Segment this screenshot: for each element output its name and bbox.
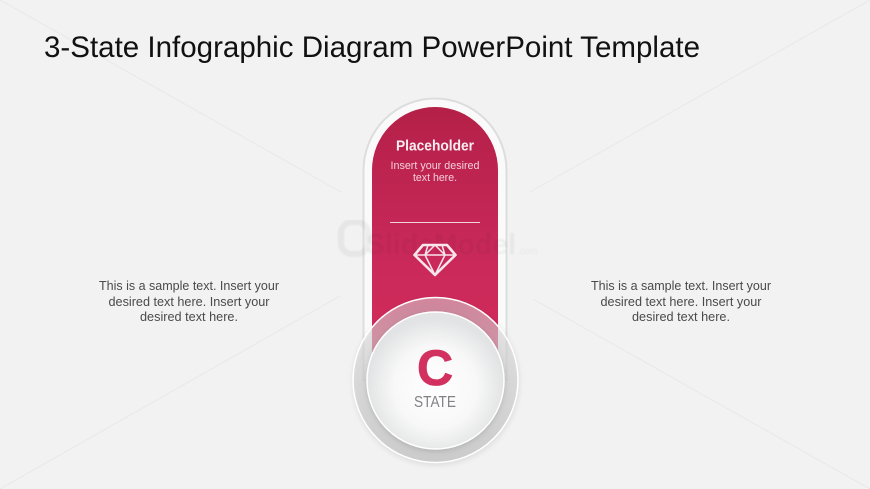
white disc	[367, 312, 504, 449]
icon: diamond	[414, 245, 456, 275]
right text block	[591, 279, 771, 324]
state badge	[353, 298, 519, 465]
watermark: SlideModel	[366, 229, 516, 261]
placeholder heading: Placeholder	[396, 138, 474, 154]
white disc shadow	[366, 313, 504, 451]
capsule outer white frame	[364, 98, 506, 380]
capsule panel	[341, 98, 538, 380]
left text block: This is a sample text. Insert your	[99, 279, 279, 293]
state label: STATE	[414, 394, 456, 411]
title: 3-State Infographic Diagram PowerPoint Template	[44, 31, 700, 64]
left text block: desired text here. Insert your	[108, 295, 270, 309]
left text block	[99, 279, 279, 324]
divider	[390, 222, 480, 224]
badge drop shadow	[353, 299, 519, 465]
letter C: C	[417, 340, 453, 396]
left text block: desired text here.	[140, 310, 238, 324]
right text block: desired text here.	[632, 310, 730, 324]
placeholder description: text here.	[413, 172, 457, 184]
placeholder description: Insert your desired	[390, 160, 480, 172]
capsule red body	[372, 107, 498, 380]
watermark: .com	[517, 246, 538, 256]
right text block: desired text here. Insert your	[600, 295, 762, 309]
watermark	[341, 222, 538, 261]
right text block: This is a sample text. Insert your	[591, 279, 771, 293]
placeholder description	[390, 160, 480, 184]
translucent ring	[353, 298, 518, 462]
